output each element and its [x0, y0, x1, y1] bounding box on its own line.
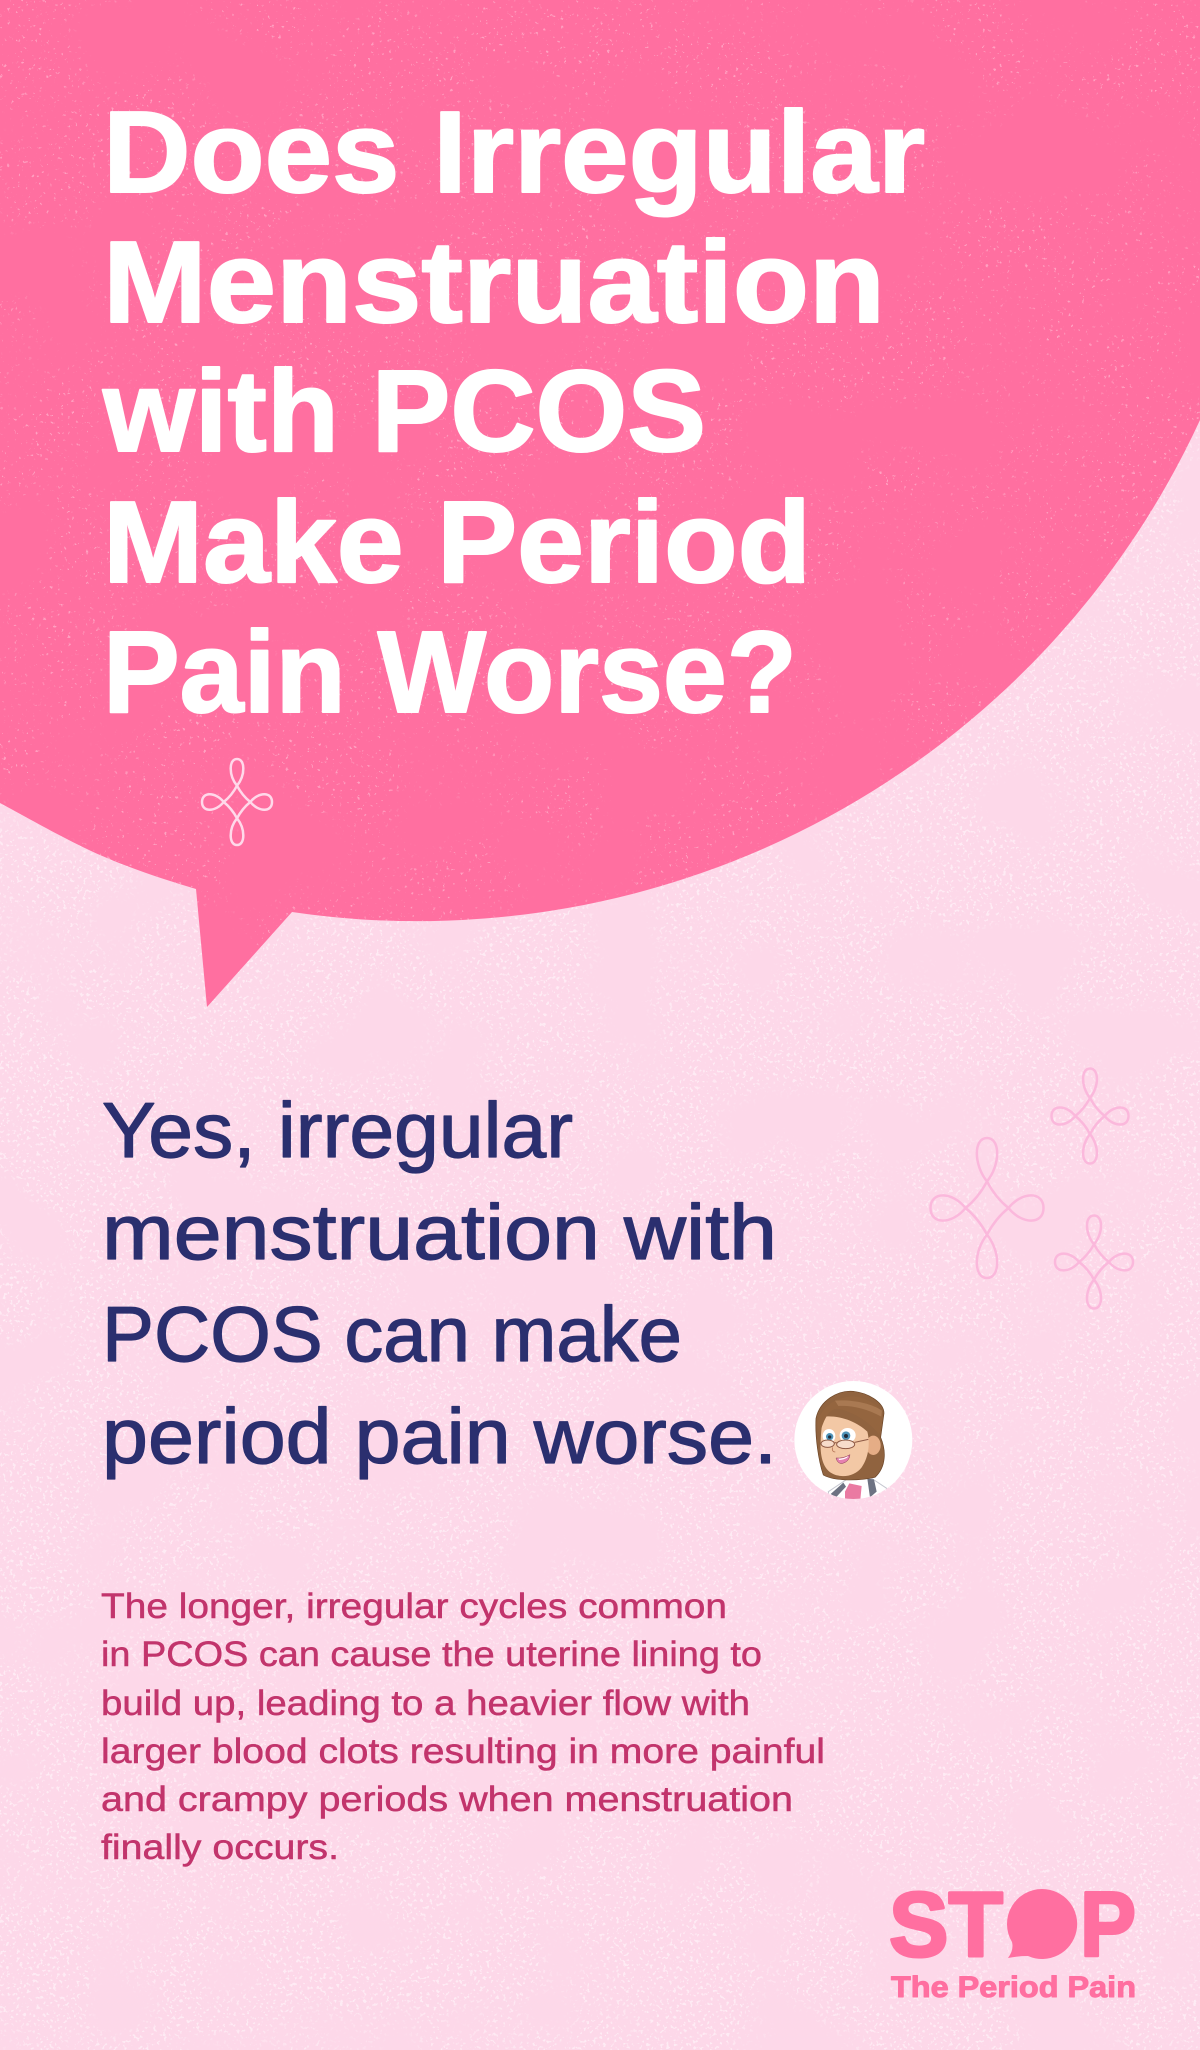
answer heading: menstruation with: [102, 1188, 777, 1276]
bubble speckle texture: [0, 0, 1200, 1010]
sparkles cluster: [930, 1068, 1133, 1308]
body text: build up, leading to a heavier flow with: [101, 1684, 750, 1723]
speech bubble: [0, 0, 1200, 1007]
title: Make Period: [103, 477, 811, 607]
body text: larger blood clots resulting in more painful: [101, 1732, 825, 1771]
title: Menstruation: [103, 217, 885, 347]
answer heading: Yes, irregular: [102, 1086, 573, 1174]
body text: in PCOS can cause the uterine lining to: [101, 1635, 762, 1674]
title: Pain Worse?: [103, 607, 797, 737]
body text: and crampy periods when menstruation: [101, 1780, 793, 1819]
answer heading: [102, 1086, 777, 1480]
title: Does Irregular: [103, 87, 925, 217]
body text: finally occurs.: [101, 1828, 339, 1867]
logo: STOP The Period Pain: [889, 1874, 1136, 2004]
title: [102, 87, 925, 737]
logo: STOP The Period Pain: P: [1080, 1874, 1136, 1976]
body text: [101, 1587, 825, 1867]
answer heading: period pain worse.: [102, 1392, 777, 1480]
sparkle inside bubble: [202, 759, 272, 845]
icon: doctor avatar: [794, 1381, 912, 1503]
answer heading: PCOS can make: [102, 1290, 682, 1378]
logo: STOP The Period Pain: ST: [889, 1874, 1003, 1976]
title: with PCOS: [102, 346, 706, 476]
body text: The longer, irregular cycles common: [101, 1587, 727, 1626]
logo: STOP The Period Pain: The Period Pain: [891, 1971, 1136, 2004]
